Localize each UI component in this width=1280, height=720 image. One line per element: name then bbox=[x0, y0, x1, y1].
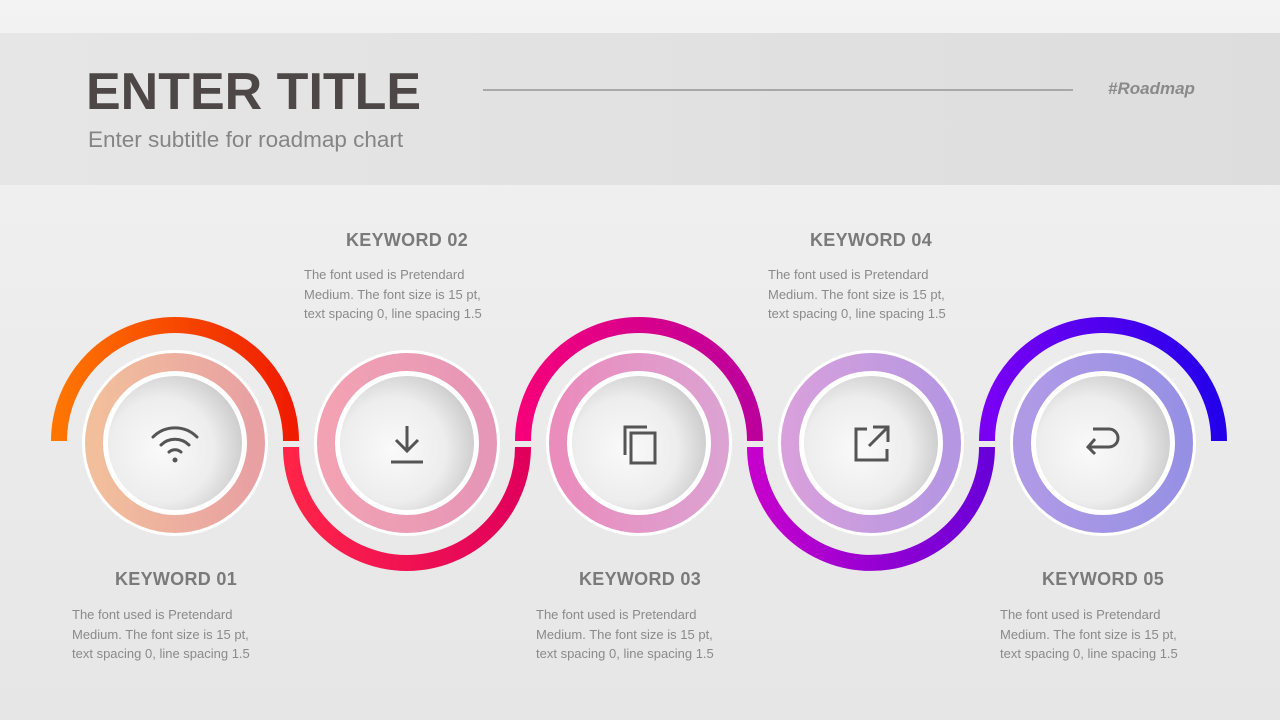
icon: copy bbox=[625, 427, 655, 463]
step 5 text: KEYWORD 05 bbox=[1042, 569, 1164, 589]
circle 1 bbox=[82, 350, 268, 536]
text: The font used is Pretendard Medium. The font size is 15 pt, text spacing 0, line spacing 1.5 bbox=[536, 607, 714, 661]
text: The font used is Pretendard Medium. The font size is 15 pt, text spacing 0, line spacing 1.5 bbox=[1000, 607, 1178, 661]
icon: return arrow bbox=[1088, 429, 1118, 454]
hashtag: #Roadmap bbox=[1108, 79, 1195, 98]
step 4 text: KEYWORD 04 bbox=[810, 230, 932, 250]
text: The font used is Pretendard Medium. The font size is 15 pt, text spacing 0, line spacing 1.5 bbox=[304, 267, 482, 321]
step 3 text: KEYWORD 03 bbox=[579, 569, 701, 589]
step 2 text: KEYWORD 02 bbox=[346, 230, 468, 250]
arcs bbox=[59, 325, 1219, 563]
text: The font used is Pretendard Medium. The font size is 15 pt, text spacing 0, line spacing 1.5 bbox=[768, 267, 946, 321]
icon: download bbox=[391, 426, 423, 462]
text: The font used is Pretendard Medium. The font size is 15 pt, text spacing 0, line spacing 1.5 bbox=[72, 607, 250, 661]
title: ENTER TITLE bbox=[86, 63, 421, 121]
divider line bbox=[483, 89, 1073, 91]
icon: external link bbox=[856, 427, 888, 460]
subtitle: Enter subtitle for roadmap chart bbox=[88, 127, 403, 152]
circle 5 bbox=[1010, 350, 1196, 536]
circle 4 bbox=[778, 350, 964, 536]
circle 2 bbox=[314, 350, 500, 536]
step 1 text: KEYWORD 01 bbox=[115, 569, 237, 589]
circle 3 bbox=[546, 350, 732, 536]
header band bbox=[0, 33, 1280, 185]
icon: wifi bbox=[153, 428, 197, 452]
